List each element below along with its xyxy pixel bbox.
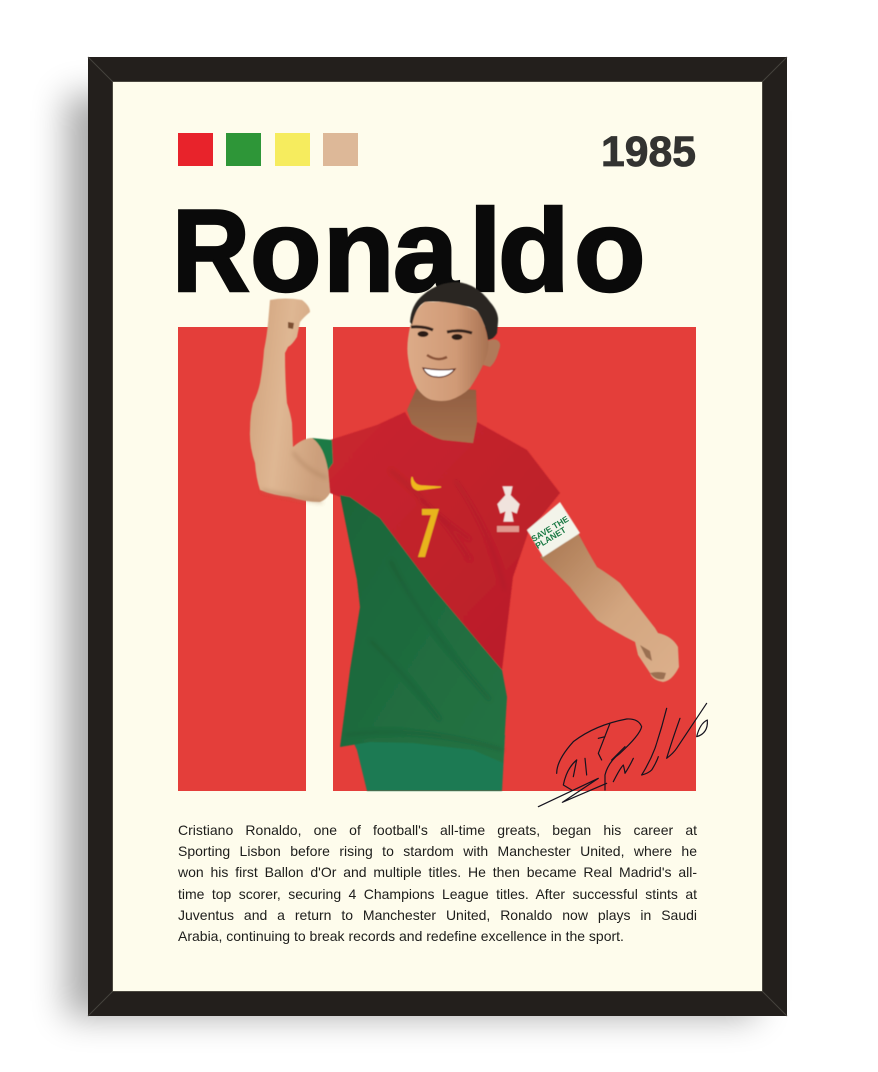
green folds [345, 560, 503, 750]
picture frame [88, 57, 787, 1016]
biography text: Cristiano Ronaldo, one of football's all-time greats, began his career at [178, 822, 697, 838]
biography text: Arabia, continuing to break records and redefine excellence in the sport. [178, 928, 624, 944]
face details [411, 327, 472, 377]
shirt folds [390, 470, 505, 590]
armband text: SAVE THE [529, 514, 571, 544]
biography text: Sporting Lisbon before rising to stardom with Manchester United, where he [178, 843, 697, 859]
colour swatches [178, 133, 358, 166]
biography text [178, 822, 697, 944]
biography text: time top scorer, securing 4 Champions League titles. After successful stints at [178, 886, 697, 902]
neck [407, 385, 477, 445]
title: R [172, 185, 250, 316]
shorts [350, 735, 505, 791]
title: onaldo [250, 185, 645, 316]
green sleeve trim [312, 438, 333, 470]
year: 1985 [601, 128, 696, 176]
signature [538, 703, 707, 807]
armband text: PLANET [533, 524, 568, 551]
hair [410, 282, 498, 340]
player figure [250, 282, 679, 791]
poster paper [113, 82, 762, 991]
red panel right [333, 327, 696, 791]
ear [483, 339, 500, 367]
raised arm [250, 298, 330, 502]
crest [497, 486, 520, 532]
right forearm [540, 533, 679, 682]
kit swoosh [412, 477, 441, 490]
red panel left [178, 327, 306, 791]
armband [527, 502, 580, 557]
biography text: Juventus and a return to Manchester United, Ronaldo now plays in Saudi [178, 907, 697, 923]
shirt [328, 412, 560, 670]
head [407, 302, 488, 401]
green shirt panel [340, 495, 507, 763]
biography text: won his first Ballon d'Or and multiple titles. He then became Real Madrid's all- [178, 864, 697, 880]
shirt number [418, 509, 439, 557]
frame shadow [66, 95, 756, 1017]
